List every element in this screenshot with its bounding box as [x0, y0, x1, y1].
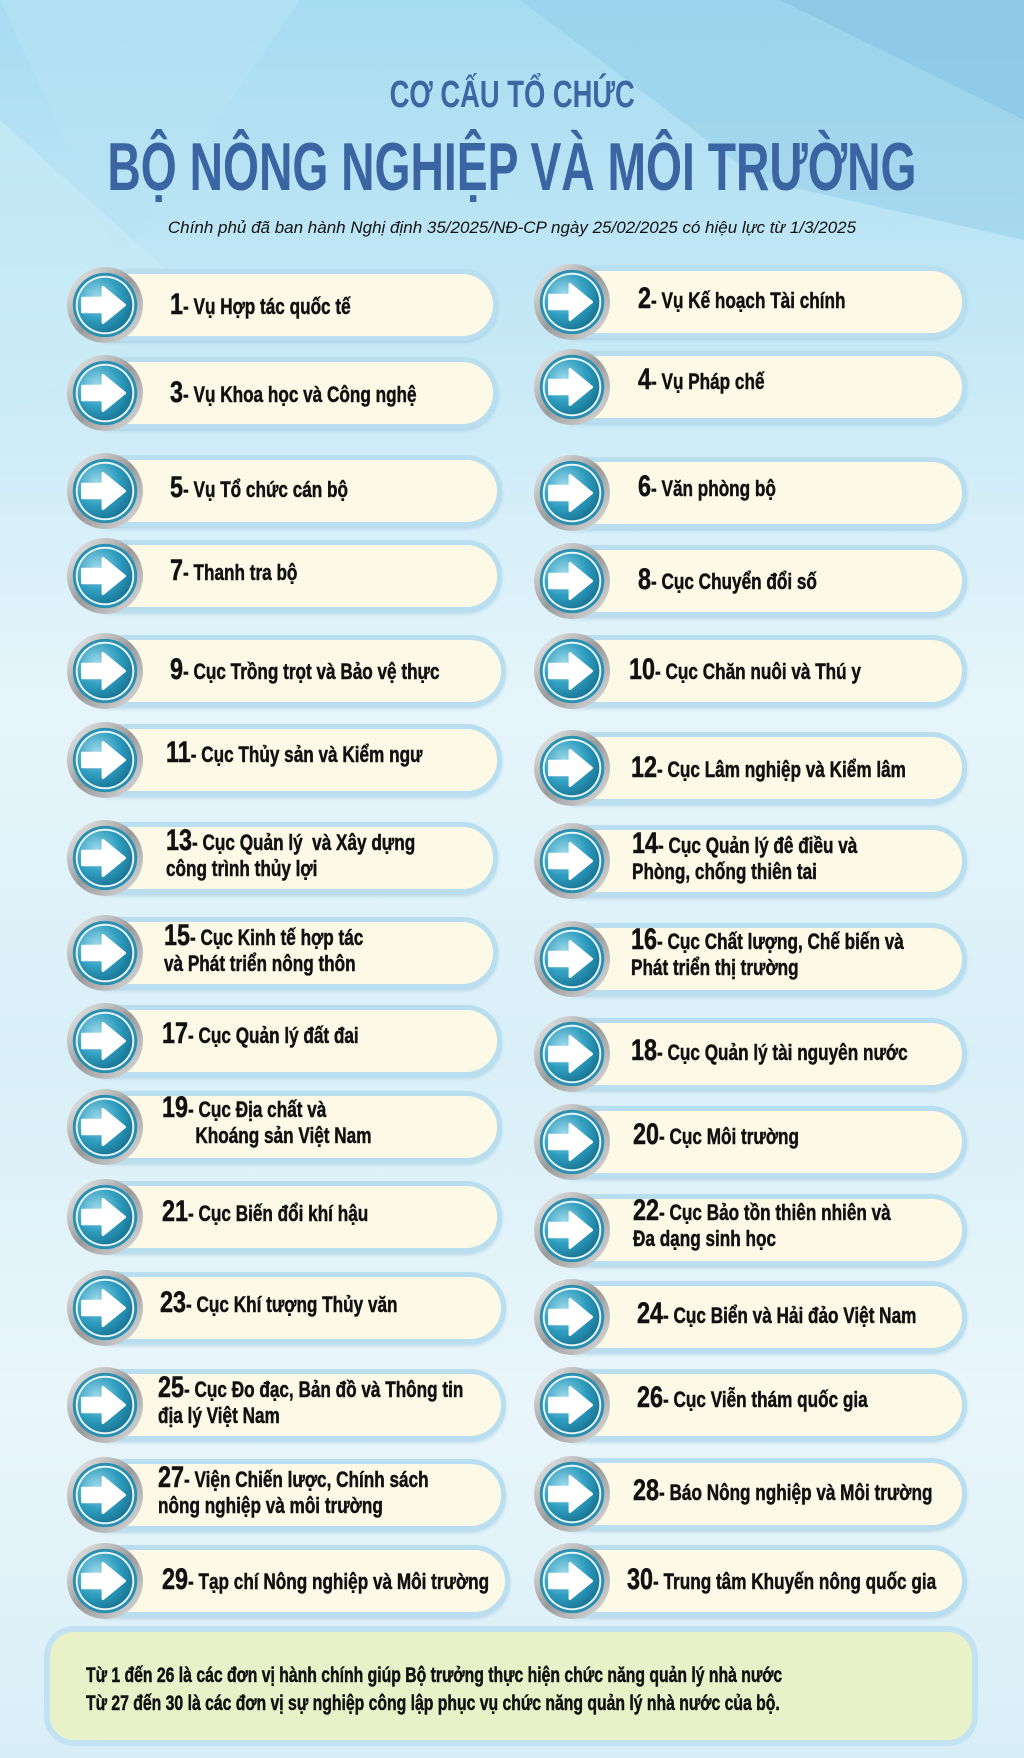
item 27: nông nghiệp và môi trường [158, 1493, 383, 1518]
item 15: và Phát triển nông thôn [164, 951, 356, 976]
item 22: 22- Cục Bảo tồn thiên nhiên và [633, 1194, 891, 1227]
item 5: 5- Vụ Tổ chức cán bộ [170, 471, 348, 504]
item 23: 23- Cục Khí tượng Thủy văn [160, 1286, 398, 1319]
item 16: Phát triển thị trường [631, 955, 799, 980]
item 8: 8- Cục Chuyển đổi số [638, 563, 817, 596]
item 12: 12- Cục Lâm nghiệp và Kiểm lâm [631, 751, 906, 784]
item 22: Đa dạng sinh học [633, 1226, 776, 1251]
footer note box [44, 1626, 978, 1746]
item 6: 6- Văn phòng bộ [638, 470, 776, 503]
item 24 [534, 1279, 968, 1356]
item 29 [67, 1543, 511, 1620]
item 4 [534, 349, 968, 426]
item 2 [534, 264, 968, 341]
footer line 2: Từ 27 đến 30 là các đơn vị sự nghiệp công lập phục vụ chức năng quản lý nhà nước của bộ. [86, 1692, 780, 1715]
item 28: 28- Báo Nông nghiệp và Môi trường [633, 1474, 932, 1507]
item 13 [67, 820, 499, 898]
item 25: 25- Cục Đo đạc, Bản đồ và Thông tin [158, 1371, 463, 1404]
title line 1: CƠ CẤU TỔ CHỨC [389, 74, 635, 116]
item 29: 29- Tạp chí Nông nghiệp và Môi trường [162, 1563, 489, 1596]
item 8 [534, 543, 968, 620]
item 7 [67, 538, 503, 616]
item 15: 15- Cục Kinh tế hợp tác [164, 919, 363, 952]
item 14 [534, 823, 968, 900]
item 30 [534, 1543, 968, 1620]
footer line 1: Từ 1 đến 26 là các đơn vị hành chính giúp Bộ trưởng thực hiện chức năng quản lý nhà nước [86, 1664, 782, 1687]
item 30: 30- Trung tâm Khuyến nông quốc gia [627, 1563, 936, 1596]
item 12 [534, 730, 968, 808]
item 15 [67, 915, 499, 992]
item 28 [534, 1456, 968, 1534]
item 26 [534, 1367, 968, 1444]
item 18: 18- Cục Quản lý tài nguyên nước [631, 1034, 908, 1067]
item 1: 1- Vụ Hợp tác quốc tế [170, 288, 351, 321]
item 17: 17- Cục Quản lý đất đai [162, 1017, 359, 1050]
item 23 [67, 1270, 508, 1348]
item 6 [534, 455, 968, 532]
item 14: 14- Cục Quản lý đê điều và [632, 827, 857, 860]
item 4: 4- Vụ Pháp chế [638, 363, 764, 396]
item 19: Khoáng sản Việt Nam [195, 1123, 371, 1148]
item 21 [67, 1179, 503, 1256]
item 24: 24- Cục Biển và Hải đảo Việt Nam [637, 1297, 916, 1330]
subtitle: Chính phủ đã ban hành Nghị định 35/2025/NĐ-CP ngày 25/02/2025 có hiệu lực từ 1/3/2025 [168, 218, 856, 237]
item 27: 27- Viện Chiến lược, Chính sách [158, 1461, 429, 1494]
item 21: 21- Cục Biến đổi khí hậu [162, 1195, 368, 1228]
item 3: 3- Vụ Khoa học và Công nghệ [170, 376, 417, 409]
item 11: 11- Cục Thủy sản và Kiểm ngư [166, 736, 422, 769]
item 20 [534, 1104, 968, 1182]
item 9: 9- Cục Trồng trọt và Bảo vệ thực [170, 653, 440, 686]
item 13: công trình thủy lợi [166, 856, 317, 881]
item 9 [67, 633, 508, 710]
item 19 [67, 1089, 503, 1166]
item 7: 7- Thanh tra bộ [170, 554, 297, 587]
item 18 [534, 1016, 968, 1094]
item 3 [67, 355, 499, 432]
item 10 [534, 633, 968, 710]
item 26: 26- Cục Viễn thám quốc gia [637, 1381, 868, 1414]
item 16 [534, 921, 968, 998]
item 25 [67, 1367, 508, 1444]
item 25: địa lý Việt Nam [158, 1403, 280, 1428]
main title: BỘ NÔNG NGHIỆP VÀ MÔI TRƯỜNG [107, 129, 917, 205]
item 17 [67, 1003, 503, 1080]
item 1 [67, 267, 499, 344]
item 11 [67, 722, 504, 800]
item 19: 19- Cục Địa chất và [162, 1091, 326, 1124]
item 10: 10- Cục Chăn nuôi và Thú y [629, 653, 861, 686]
item 5 [67, 453, 503, 530]
item 16: 16- Cục Chất lượng, Chế biến và [631, 923, 904, 956]
item 22 [534, 1192, 968, 1270]
item 2: 2- Vụ Kế hoạch Tài chính [638, 282, 846, 315]
item 20: 20- Cục Môi trường [633, 1118, 799, 1151]
item 27 [67, 1457, 508, 1534]
item 13: 13- Cục Quản lý và Xây dựng [166, 824, 415, 857]
item 14: Phòng, chống thiên tai [632, 859, 817, 884]
